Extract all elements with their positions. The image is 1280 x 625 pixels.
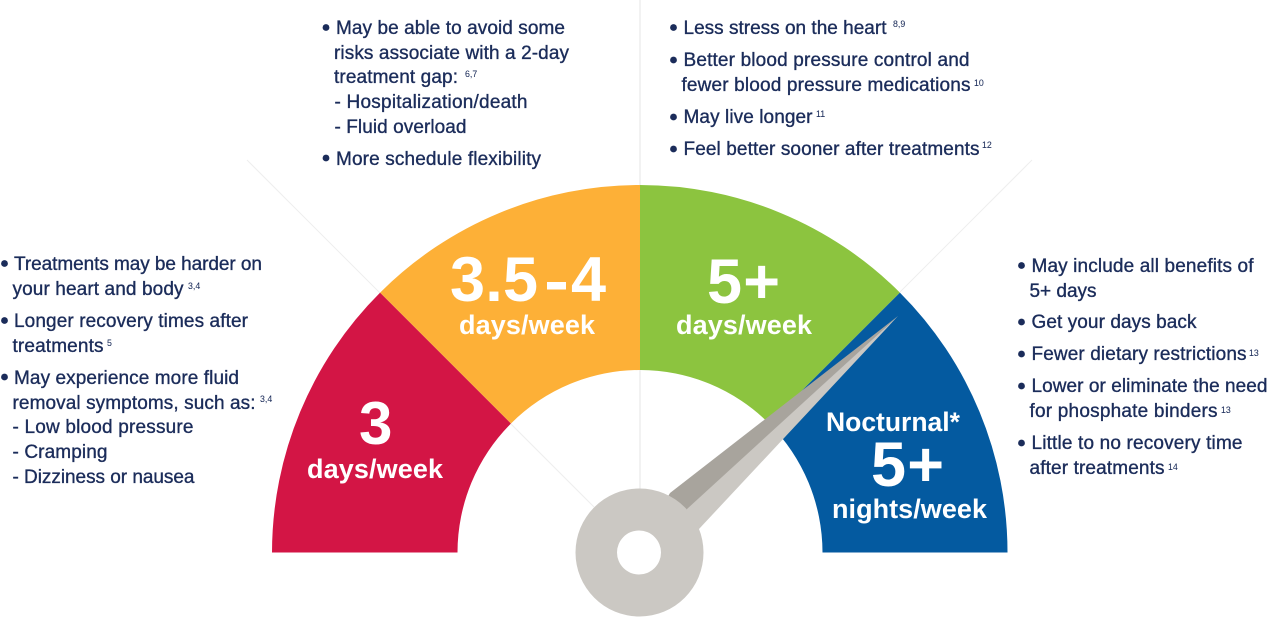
needle dark side — [660, 316, 898, 510]
bullet: fluid removal symptoms: - Dizziness or nausea — [12, 467, 195, 488]
bullet: phosphate binders: 13 — [1221, 405, 1231, 415]
bullet: longer recovery: 5 — [107, 338, 112, 348]
gauge label: 3.5-4 days/week — [450, 245, 606, 340]
bullet: harder on heart: your heart and body — [12, 279, 184, 300]
gauge label: 5+ days/week — [676, 247, 813, 340]
bullet: phosphate binders — [1018, 376, 1268, 422]
bullet: less stress: Less stress on the heart — [684, 18, 887, 39]
bullet: recovery time: Little to no recovery time — [1032, 433, 1242, 454]
bullet: avoid 2-day gap risks: - Hospitalization/death — [334, 92, 528, 113]
bullet: fluid removal symptoms: - Cramping — [12, 442, 108, 463]
bullet: avoid 2-day gap risks: risks associate with a 2-day — [334, 43, 570, 64]
text block: nocturnal effects — [1018, 256, 1268, 479]
gauge label: 3 days/week: days/week — [307, 454, 444, 484]
bullet: all benefits: May include all benefits of — [1032, 256, 1254, 277]
gauge label: 3 days/week — [307, 390, 444, 484]
bullet: phosphate binders: Lower or eliminate the need — [1032, 376, 1268, 397]
hub ring — [576, 488, 704, 616]
gauge segment: 3.5-4 days/week (orange) — [380, 185, 640, 424]
bullet: avoid 2-day gap risks: - Fluid overload — [334, 117, 466, 138]
text block: 3 days/week effects — [1, 254, 272, 488]
gauge label: Nocturnal 5+ nights/week: nights/week — [832, 494, 988, 524]
gauge segment: nocturnal 5+ nights/week (blue) — [769, 293, 1008, 552]
needle light side — [680, 316, 898, 530]
bullet: may live longer: 11 — [816, 109, 825, 119]
bullet: dietary restrictions: 13 — [1249, 348, 1259, 358]
gauge label: 3.5-4 days/week: days/week — [459, 310, 596, 340]
text block: 5+ days/week effects — [670, 18, 992, 160]
bullet: fluid removal symptoms — [1, 368, 272, 488]
bullet: harder on heart: 3,4 — [188, 281, 200, 291]
bullet: avoid 2-day gap risks: 6,7 — [465, 69, 477, 79]
bullet: fluid removal symptoms: May experience more fluid — [14, 368, 239, 389]
bullet: blood pressure control — [670, 50, 984, 96]
gauge segment: 5+ days/week (green) — [640, 185, 900, 424]
radial separator lines — [247, 0, 1032, 507]
gauge label: Nocturnal 5+ nights/week — [826, 407, 988, 524]
bullet: longer recovery: Longer recovery times after — [14, 311, 249, 332]
bullet: all benefits — [1018, 256, 1254, 302]
bullet: avoid 2-day gap risks: May be able to avoid some — [336, 18, 565, 39]
gauge needle and hub — [576, 316, 898, 616]
bullet: blood pressure control: Better blood pressure control and — [684, 50, 970, 71]
gauge label: Nocturnal 5+ nights/week: 5+ — [871, 430, 944, 500]
bullet: feel better: Feel better sooner after treatments — [684, 139, 980, 160]
gauge label: 3.5-4 days/week: 3.5 — [450, 245, 538, 315]
bullet: longer recovery — [1, 311, 249, 357]
bullet: feel better: 12 — [982, 140, 992, 150]
bullet: recovery time: after treatments — [1030, 458, 1164, 479]
bullet: schedule flexibility: More schedule flexibility — [336, 149, 542, 170]
bullet: longer recovery: treatments — [12, 336, 104, 357]
gauge segment: 3 days/week (red) — [272, 293, 511, 552]
bullet: avoid 2-day gap risks — [323, 18, 570, 138]
gauge label: Nocturnal 5+ nights/week: Nocturnal* — [826, 407, 961, 437]
bullet: harder on heart: Treatments may be harder on — [14, 254, 262, 275]
bullet: less stress: 8,9 — [893, 19, 905, 29]
bullet: blood pressure control: fewer blood pressure medications — [682, 75, 970, 96]
bullet: blood pressure control: 10 — [974, 78, 984, 88]
bullet: harder on heart — [1, 254, 262, 300]
gauge label: 5+ days/week: 5+ — [707, 247, 780, 317]
bullet: all benefits: 5+ days — [1030, 281, 1096, 302]
bullet: avoid 2-day gap risks: treatment gap: — [334, 67, 458, 88]
text block: 3.5-4 days/week effects — [323, 18, 570, 170]
bullet: fluid removal symptoms: 3,4 — [260, 394, 272, 404]
bullet: recovery time: 14 — [1168, 462, 1178, 472]
bullet: dietary restrictions: Fewer dietary restrictions — [1032, 344, 1246, 365]
gauge label: 3 days/week: 3 — [359, 390, 392, 457]
gauge label: 5+ days/week: days/week — [676, 310, 813, 340]
gauge label: 3.5-4 days/week: 4 — [571, 245, 606, 315]
bullet: days back: Get your days back — [1032, 312, 1197, 333]
bullet: recovery time — [1018, 433, 1242, 479]
bullet: fluid removal symptoms: - Low blood pressure — [12, 417, 194, 438]
bullet: may live longer: May live longer — [684, 107, 813, 128]
bullet: fluid removal symptoms: removal symptoms, such as: — [12, 393, 256, 414]
bullet: phosphate binders: for phosphate binders — [1030, 401, 1218, 422]
